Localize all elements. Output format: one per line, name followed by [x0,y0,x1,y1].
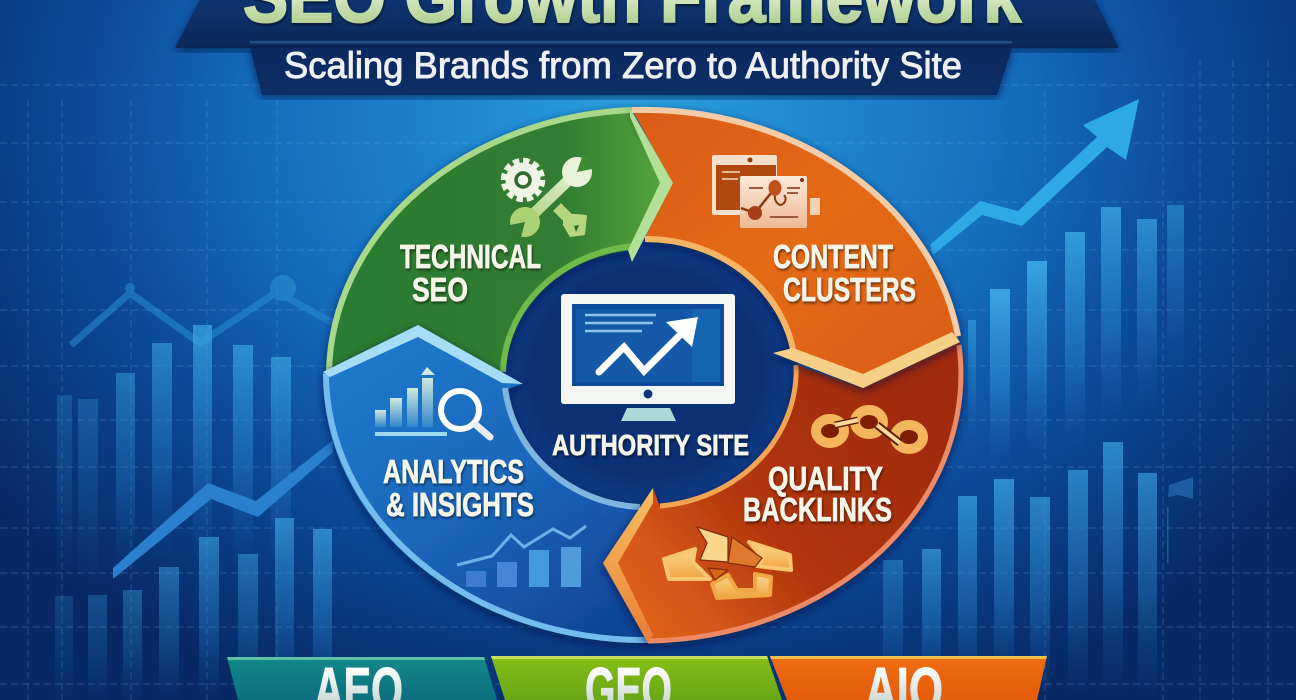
segment: content clusters [632,109,960,388]
right growth arrow [930,99,1139,255]
label: quality backlinks: QUALITY [768,460,883,497]
tab: geo [491,656,782,700]
label: analytics and insights: & INSIGHTS [386,486,534,523]
mini chart [457,526,586,587]
label: content clusters: CONTENT [773,238,893,275]
icon: gear and wrenches [504,154,597,241]
green chevron border [628,108,673,262]
icon: analytics bars and magnifier [375,367,490,437]
faint flag arrow [1167,477,1193,563]
icon: monitor [561,294,735,421]
tab: aio [770,656,1047,700]
icon: content cards [712,155,820,228]
left upper bar chart [57,325,291,589]
left growth line [113,440,333,579]
segment: quality backlinks [603,342,963,643]
label: content clusters [773,238,916,308]
label: quality backlinks: BACKLINKS [743,491,892,528]
centre disc [495,235,799,511]
label: analytics and insights [383,453,534,523]
subtitle: Scaling Brands from Zero to Authority Site [284,45,962,86]
icon: chain links [816,410,923,449]
label: technical seo [400,238,541,308]
label: content clusters: CLUSTERS [783,271,916,308]
icon: handshake [664,527,791,598]
left lower bar chart [55,518,332,700]
label: quality backlinks [743,460,892,528]
segment: technical seo [329,110,664,372]
label: analytics and insights: ANALYTICS [383,453,524,490]
label: technical seo: TECHNICAL [400,238,541,275]
segment: analytics and insights [323,325,648,642]
tab: aeo [227,656,497,700]
left line chart [71,275,333,345]
label: authority site: AUTHORITY SITE [552,430,749,462]
right lower bar chart [883,442,1157,700]
right upper bar chart [968,205,1184,469]
title banner [175,0,1119,95]
label: technical seo: SEO [412,271,468,308]
